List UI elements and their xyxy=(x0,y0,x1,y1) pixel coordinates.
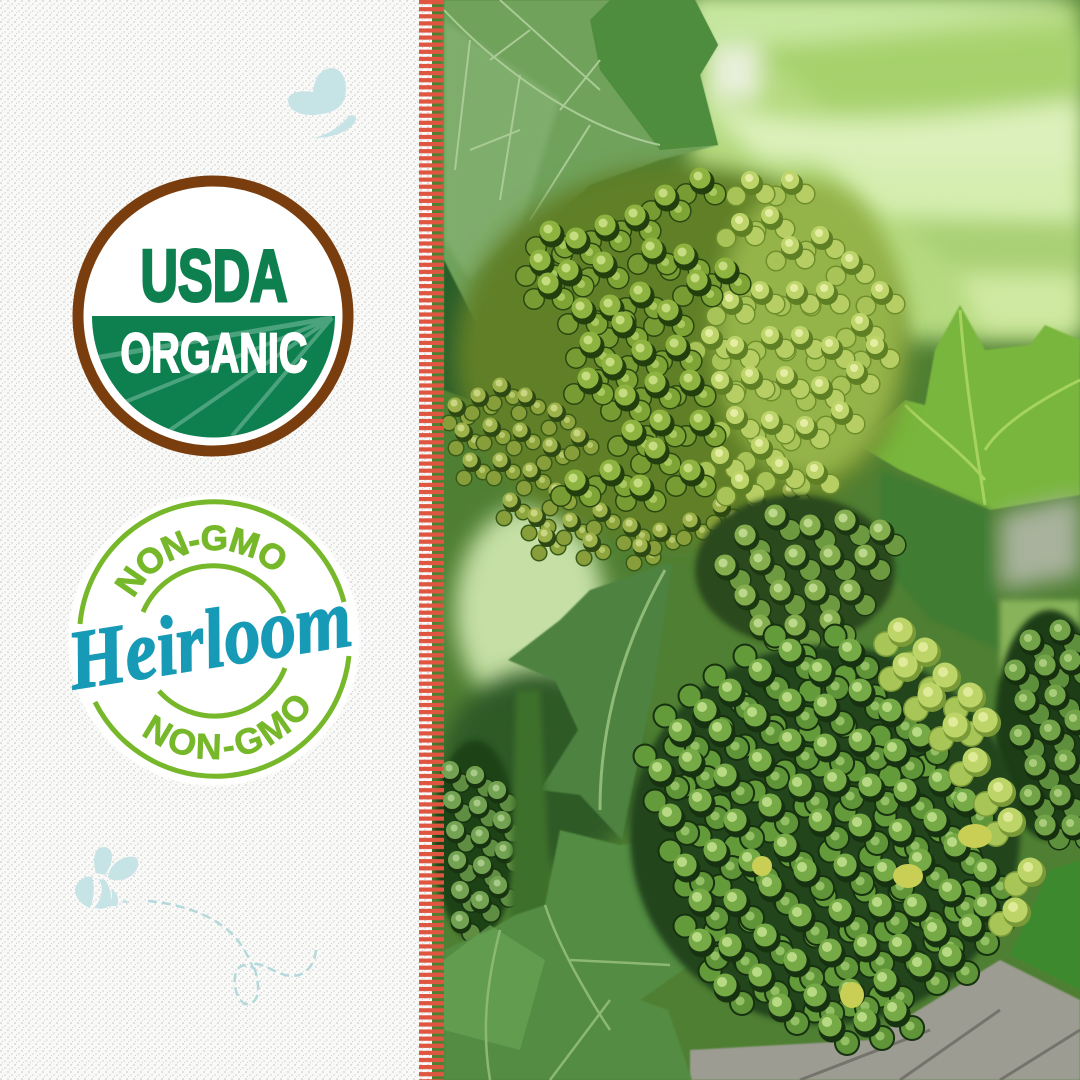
floret: upper head xyxy=(449,165,905,563)
floret: large lower head xyxy=(630,627,1032,1043)
Heirloom script: Heirloom xyxy=(61,572,358,708)
leaf top left xyxy=(444,0,718,400)
icon: butterfly xyxy=(288,68,356,138)
floret: middle head xyxy=(695,495,895,645)
ORGANIC text: ORGANIC xyxy=(120,321,308,384)
leaves bottom left xyxy=(444,690,692,1080)
icon: bee with dashed flight path xyxy=(75,847,316,1004)
panel: linen fabric background xyxy=(0,0,440,1080)
badge: Heirloom Non-GMO xyxy=(61,494,360,786)
floret: bottom left small xyxy=(433,740,517,940)
badge: USDA Organic xyxy=(78,181,348,451)
leaf centre xyxy=(508,562,672,840)
floret: right edge xyxy=(995,610,1080,840)
striped divider xyxy=(419,0,444,1080)
photo base tones xyxy=(432,0,1080,1080)
organic green field xyxy=(92,316,335,438)
green stalks top right xyxy=(690,0,1080,330)
lower floret shadow and wood surface xyxy=(690,860,1080,1080)
yellow buds xyxy=(752,824,992,1008)
USDA text: USDA xyxy=(140,236,288,317)
NON-GMO bottom text: NON-GMO xyxy=(142,696,309,760)
photo: broccoli raab xyxy=(432,0,1080,1080)
leaf right xyxy=(858,305,1080,680)
NON-GMO top text: NON-GMO xyxy=(114,525,286,598)
